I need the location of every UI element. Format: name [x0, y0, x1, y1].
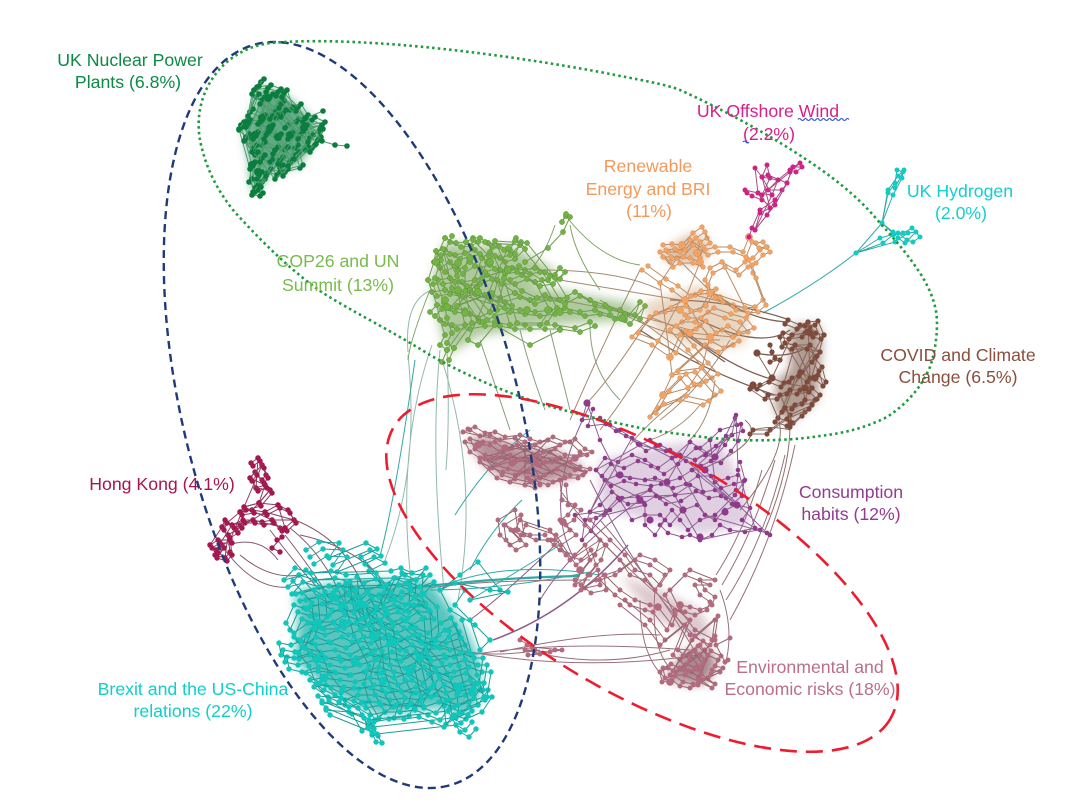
- cluster: Environmental and Economic risks: [463, 427, 730, 688]
- label: Environmental and Economic risks: Economic risks (18%): [724, 679, 896, 699]
- cluster: COVID and Climate Change: [750, 320, 826, 434]
- cluster: Renewable Energy and BRI: [632, 227, 770, 417]
- inter-cluster curved edges: [225, 216, 856, 680]
- label: Brexit and the US-China relations: Brexit and the US-China: [98, 679, 289, 699]
- label: Renewable Energy and BRI: (11%): [626, 201, 672, 221]
- label: COP26 and UN Summit: COP26 and UN: [277, 251, 399, 271]
- label: UK Nuclear Power Plants: UK Nuclear Power: [57, 50, 203, 70]
- label: COVID and Climate Change: Change (6.5%): [899, 367, 1017, 387]
- label: UK Offshore Wind: (2.2%): [743, 124, 795, 144]
- cluster: UK Hydrogen: [856, 170, 920, 253]
- cluster: COP26 and UN Summit: [428, 214, 645, 362]
- cluster: Brexit and the US-China relations: [279, 542, 508, 743]
- label: UK Hydrogen: UK Hydrogen: [907, 181, 1013, 201]
- label: UK Hydrogen: (2.0%): [935, 203, 987, 223]
- label: Consumption habits: Consumption: [799, 482, 903, 502]
- cluster: UK Offshore Wind: [745, 163, 802, 237]
- cluster: Consumption habits: [575, 403, 770, 540]
- spell-check underlines: [743, 118, 849, 143]
- label: Consumption habits: habits (12%): [801, 504, 901, 524]
- label: Renewable Energy and BRI: Energy and BRI: [586, 179, 710, 199]
- label: UK Offshore Wind: UK Offshore Wind: [697, 101, 839, 121]
- dashed red ellipse: [333, 324, 951, 811]
- network graph: [210, 79, 920, 743]
- label: COP26 and UN Summit: Summit (13%): [282, 275, 394, 295]
- label: Brexit and the US-China relations: relations (22%): [134, 701, 252, 721]
- label: COVID and Climate Change: COVID and Climate: [880, 345, 1036, 365]
- dashed blue ellipse: [94, 2, 610, 811]
- label: Hong Kong: Hong Kong (4.1%): [89, 474, 235, 494]
- label: Renewable Energy and BRI: Renewable: [604, 156, 692, 176]
- label: UK Nuclear Power Plants: Plants (6.8%): [75, 72, 181, 92]
- cluster: Hong Kong: [210, 458, 296, 561]
- label: Environmental and Economic risks: Environmental and: [736, 657, 884, 677]
- dotted green outline: [199, 41, 937, 440]
- cluster: UK Nuclear Power Plants: [239, 79, 347, 196]
